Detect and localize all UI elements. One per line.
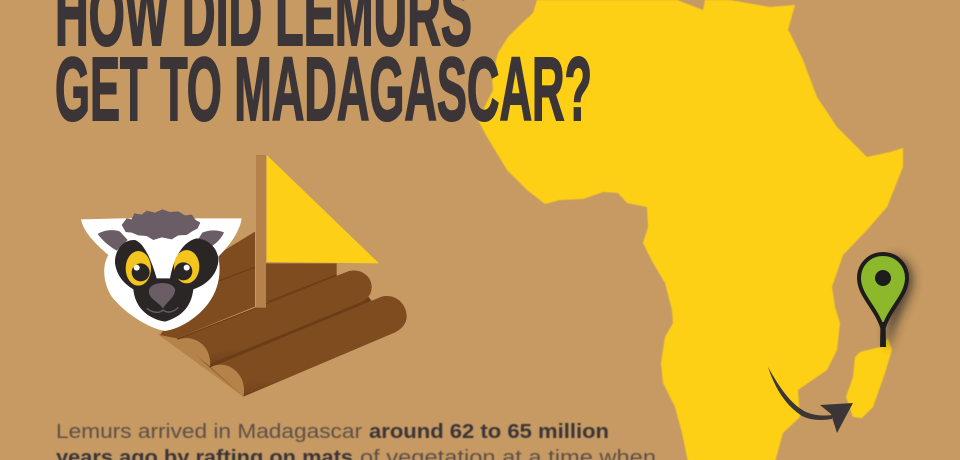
- middle log: [177, 270, 372, 367]
- mouth: [147, 307, 178, 312]
- heading: [55, 0, 592, 140]
- shade under the sail: [266, 263, 337, 305]
- left eye: [126, 251, 151, 286]
- front log: [211, 296, 407, 397]
- body text: [56, 421, 656, 460]
- log base: [177, 271, 395, 397]
- migration arrow: [768, 367, 853, 433]
- forehead tuft: [122, 209, 200, 240]
- sail: [267, 155, 379, 263]
- pin centre dot: [875, 270, 891, 286]
- log joints: [217, 267, 337, 302]
- lemur on a raft illustration: [81, 155, 407, 397]
- mast: [256, 155, 266, 308]
- pin body: [859, 254, 907, 330]
- raft shadow side: [157, 333, 243, 397]
- pin shadow: [886, 256, 913, 346]
- location pin over Madagascar: [859, 254, 913, 347]
- left ear: [98, 230, 128, 251]
- map of Africa with Madagascar: [478, 0, 903, 460]
- pin needle: [880, 322, 886, 347]
- right eye: [174, 250, 199, 283]
- Madagascar island: [846, 338, 892, 418]
- lemur head: [81, 209, 242, 331]
- body text: Lemurs arrived in Madagascar: [56, 421, 362, 443]
- nose: [149, 283, 175, 308]
- body text: around 62 to 65 million: [369, 421, 609, 443]
- eye mask and muzzle: [115, 238, 218, 322]
- raft: [157, 155, 407, 397]
- rear logs: [160, 232, 255, 338]
- right ear: [197, 230, 224, 250]
- white fur: [81, 218, 242, 331]
- Africa landmass: [478, 0, 903, 460]
